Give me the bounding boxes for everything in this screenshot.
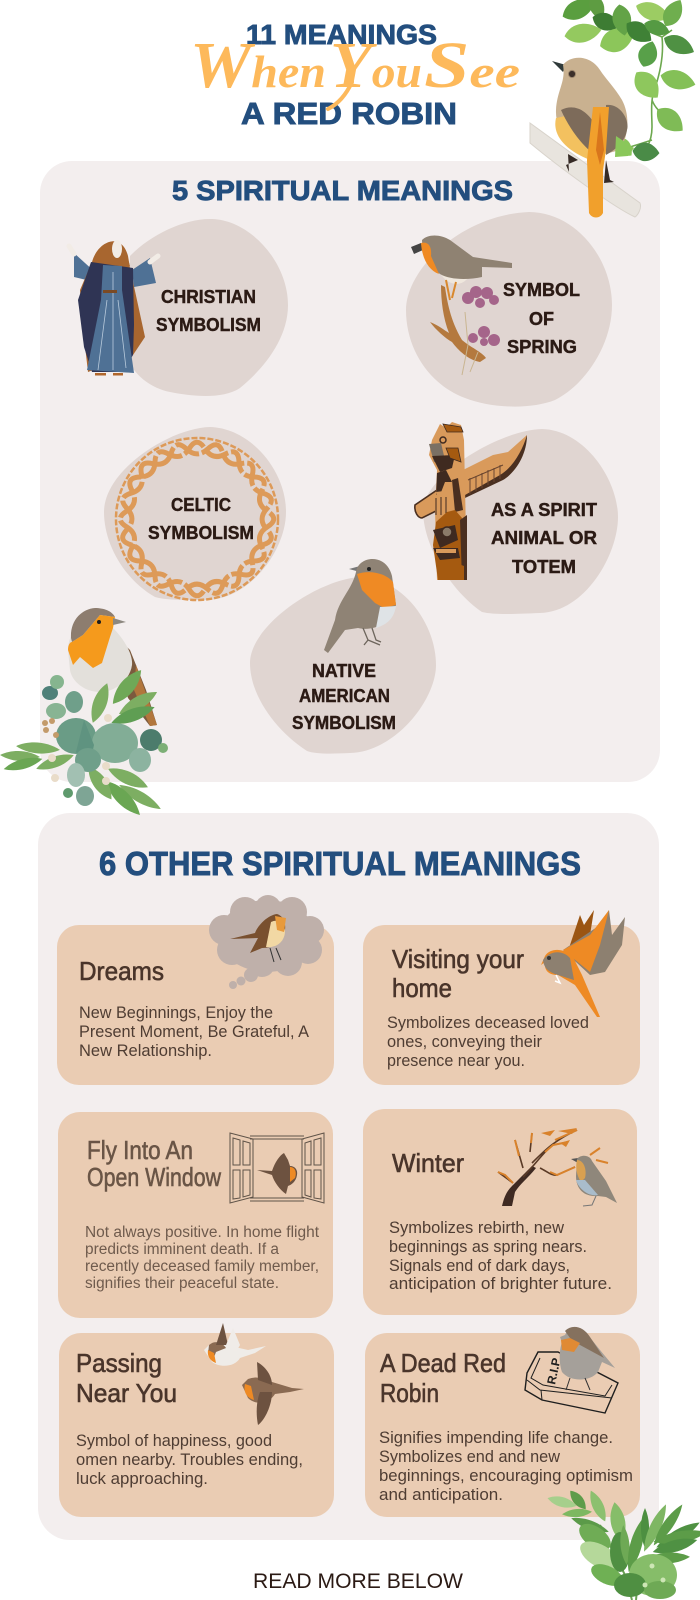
- title: [190, 19, 520, 131]
- body text: Symbolizes end and new: [379, 1448, 560, 1466]
- body text: Symbolizes deceased loved: [387, 1014, 589, 1032]
- body text: [387, 1014, 589, 1070]
- body text: presence near you.: [387, 1052, 525, 1070]
- body text: Present Moment, Be Grateful, A: [79, 1023, 309, 1041]
- label: [491, 500, 597, 577]
- icon: totem pole: [415, 422, 527, 580]
- body text: predicts imminent death. If a: [85, 1241, 279, 1258]
- label: SYMBOL: [503, 280, 580, 300]
- body text: recently deceased family member,: [85, 1258, 319, 1275]
- icon: celtic knot ring: [103, 425, 291, 613]
- icon: robed figure: [69, 240, 158, 376]
- body text: luck approaching.: [76, 1470, 208, 1488]
- heading: A Dead Red: [380, 1348, 506, 1378]
- item: spirit animal or totem: [415, 422, 618, 614]
- item: christian symbolism: [69, 219, 288, 396]
- heading: Fly Into An: [87, 1135, 193, 1165]
- heading: 6 other spiritual meanings: 6 OTHER SPIRITUAL MEANINGS: [99, 845, 581, 882]
- item: symbol of spring: [406, 212, 612, 407]
- label: SYMBOLISM: [156, 315, 261, 335]
- card: fly into an open window: [58, 1112, 333, 1318]
- body text: Signifies impending life change.: [379, 1429, 613, 1447]
- panel: 6 other spiritual meanings: [38, 813, 659, 1540]
- body text: ones, conveying their: [387, 1033, 542, 1051]
- label: ANIMAL OR: [491, 528, 597, 548]
- body text: omen nearby. Troubles ending,: [76, 1451, 303, 1469]
- label: [156, 287, 261, 335]
- card: dreams: [57, 895, 334, 1085]
- body text: Not always positive. In home flight: [85, 1224, 320, 1241]
- illustration: hanging vine: [559, 0, 698, 162]
- heading: [76, 1348, 177, 1408]
- label: [148, 495, 254, 543]
- icon: bare tree and robin: [498, 1128, 617, 1206]
- body text: [76, 1432, 303, 1488]
- icon: singing robin on a branch: [411, 236, 512, 375]
- icon: standing robin: [324, 559, 396, 653]
- icon: open window with bird: [230, 1133, 324, 1203]
- title: A RED ROBIN: [241, 96, 457, 131]
- label: [292, 661, 396, 733]
- label: OF: [529, 309, 554, 329]
- heading: Visiting your: [392, 944, 524, 974]
- label: SYMBOLISM: [292, 713, 396, 733]
- footer text: READ MORE BELOW: [253, 1570, 463, 1593]
- panel: 5 spiritual meanings: [40, 161, 660, 782]
- icon: flying orange bird: [541, 910, 625, 1017]
- title: You: [330, 29, 422, 102]
- heading: Robin: [380, 1378, 439, 1408]
- item: celtic symbolism: [103, 425, 291, 613]
- body text: anticipation of brighter future.: [389, 1275, 612, 1293]
- body text: signifies their peaceful state.: [85, 1275, 279, 1292]
- illustration: corner leaves: [546, 1488, 700, 1600]
- heading: Near You: [76, 1378, 177, 1408]
- label: CELTIC: [171, 495, 231, 515]
- body text: [79, 1004, 309, 1060]
- icon: thought cloud with bird: [209, 895, 324, 989]
- heading: [392, 944, 524, 1003]
- label: AMERICAN: [299, 686, 390, 706]
- label: [503, 280, 580, 357]
- label: AS A SPIRIT: [491, 500, 597, 520]
- illustration: robin with eucalyptus: [0, 608, 168, 820]
- body text: New Beginnings, Enjoy the: [79, 1004, 273, 1022]
- body text: Symbolizes rebirth, new: [389, 1219, 564, 1237]
- label: CHRISTIAN: [161, 287, 256, 307]
- icon: coffin with robin: R.I.P: [544, 1357, 563, 1386]
- icon: two flying birds: [204, 1323, 304, 1425]
- card: a dead red robin: [365, 1327, 640, 1517]
- heading: Winter: [392, 1148, 464, 1178]
- icon: coffin with robin: [525, 1327, 618, 1413]
- body text: [379, 1429, 633, 1504]
- heading: Dreams: [79, 956, 164, 986]
- item: native american symbolism: [250, 559, 436, 754]
- label: SYMBOLISM: [148, 523, 254, 543]
- title: When: [190, 29, 326, 102]
- illustration: bird on a branch: [530, 58, 641, 217]
- label: TOTEM: [512, 557, 576, 577]
- title: 11 MEANINGS: [246, 19, 437, 50]
- heading: [380, 1348, 506, 1408]
- heading: 5 spiritual meanings: 5 SPIRITUAL MEANINGS: [172, 175, 513, 206]
- heading: home: [392, 973, 452, 1003]
- body text: beginnings, encouraging optimism: [379, 1467, 633, 1485]
- body text: [85, 1224, 320, 1292]
- body text: Signals end of dark days,: [389, 1257, 570, 1275]
- label: SPRING: [507, 337, 577, 357]
- body text: Symbol of happiness, good: [76, 1432, 272, 1450]
- body text: and anticipation.: [379, 1486, 503, 1504]
- body text: beginnings as spring nears.: [389, 1238, 587, 1256]
- heading: [87, 1135, 221, 1192]
- body text: [389, 1219, 612, 1293]
- title: See: [424, 29, 520, 102]
- card: visiting your home: [363, 910, 640, 1085]
- label: NATIVE: [312, 661, 376, 681]
- card: passing near you: [59, 1323, 334, 1517]
- heading: Open Window: [87, 1162, 221, 1192]
- body text: New Relationship.: [79, 1042, 212, 1060]
- card: winter: [363, 1109, 637, 1315]
- heading: Passing: [76, 1348, 162, 1378]
